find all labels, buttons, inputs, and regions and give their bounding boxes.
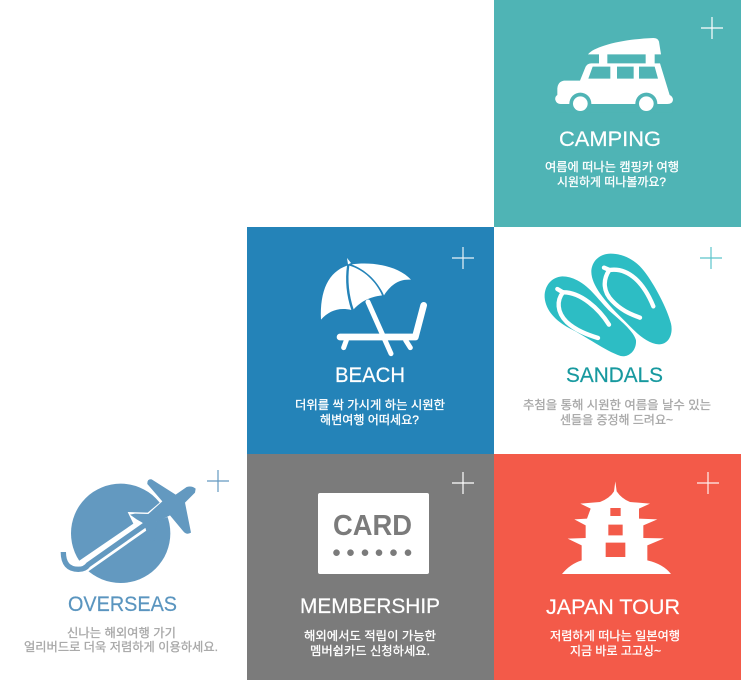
icon: airplane and globe — [63, 479, 196, 583]
text: beach description: 해변여행 어떠세요? — [320, 412, 419, 427]
text: sandals description: 센들을 증정해 드려요~ — [560, 413, 673, 427]
heading: sandals: SANDALS — [566, 364, 663, 387]
text: overseas description: 얼리버드로 더욱 저렴하게 이용하세요. — [24, 640, 218, 654]
text: overseas description — [24, 625, 218, 654]
text: camping description — [545, 159, 679, 189]
heading: overseas: OVERSEAS — [68, 593, 177, 616]
text: sandals description: 추첨을 통해 시원한 여름을 날수 있는 — [523, 398, 711, 412]
heading: beach: BEACH — [335, 364, 405, 387]
icon: plus camping — [701, 17, 723, 39]
icon: membership card: CARD — [333, 510, 412, 542]
icon: plus overseas — [207, 470, 229, 492]
panel: camping — [494, 0, 741, 227]
text: beach description — [295, 398, 445, 427]
text: camping description: 시원하게 떠나볼까요? — [557, 175, 666, 189]
text: japan tour description: 저렴하게 떠나는 일본여행 — [550, 628, 680, 643]
icon: beach umbrella and lounger — [321, 258, 424, 354]
icon: flip flops — [545, 254, 672, 356]
text: japan tour description — [550, 628, 680, 658]
text: camping description: 여름에 떠나는 캠핑카 여행 — [545, 159, 679, 174]
text: japan tour description: 지금 바로 고고싱~ — [570, 644, 661, 658]
icon: membership card — [318, 493, 429, 574]
panel: overseas — [24, 470, 229, 654]
text: beach description: 더위를 싹 가시게 하는 시원한 — [295, 398, 445, 412]
text: membership description: 해외에서도 적립이 가능한 — [304, 629, 436, 643]
heading: camping: CAMPING — [559, 128, 661, 151]
text: sandals description — [523, 398, 711, 427]
icon: camper van — [555, 38, 673, 115]
text: membership description: 멤버쉽카드 신청하세요. — [310, 644, 430, 658]
icon: japanese pagoda — [562, 481, 671, 574]
heading: japan tour: JAPAN TOUR — [546, 596, 680, 619]
text: membership description — [304, 629, 436, 658]
icon: plus sandals — [700, 247, 722, 269]
panel: beach — [247, 227, 494, 454]
panel: sandals — [494, 227, 741, 454]
heading: membership: MEMBERSHIP — [300, 595, 440, 618]
text: overseas description: 신나는 해외여행 가기 — [67, 625, 176, 640]
panel: japan tour — [494, 454, 741, 680]
icon: plus japan tour — [697, 472, 719, 494]
panel: membership — [247, 454, 494, 680]
icon: plus membership — [452, 472, 474, 494]
icon: plus beach — [452, 247, 474, 269]
